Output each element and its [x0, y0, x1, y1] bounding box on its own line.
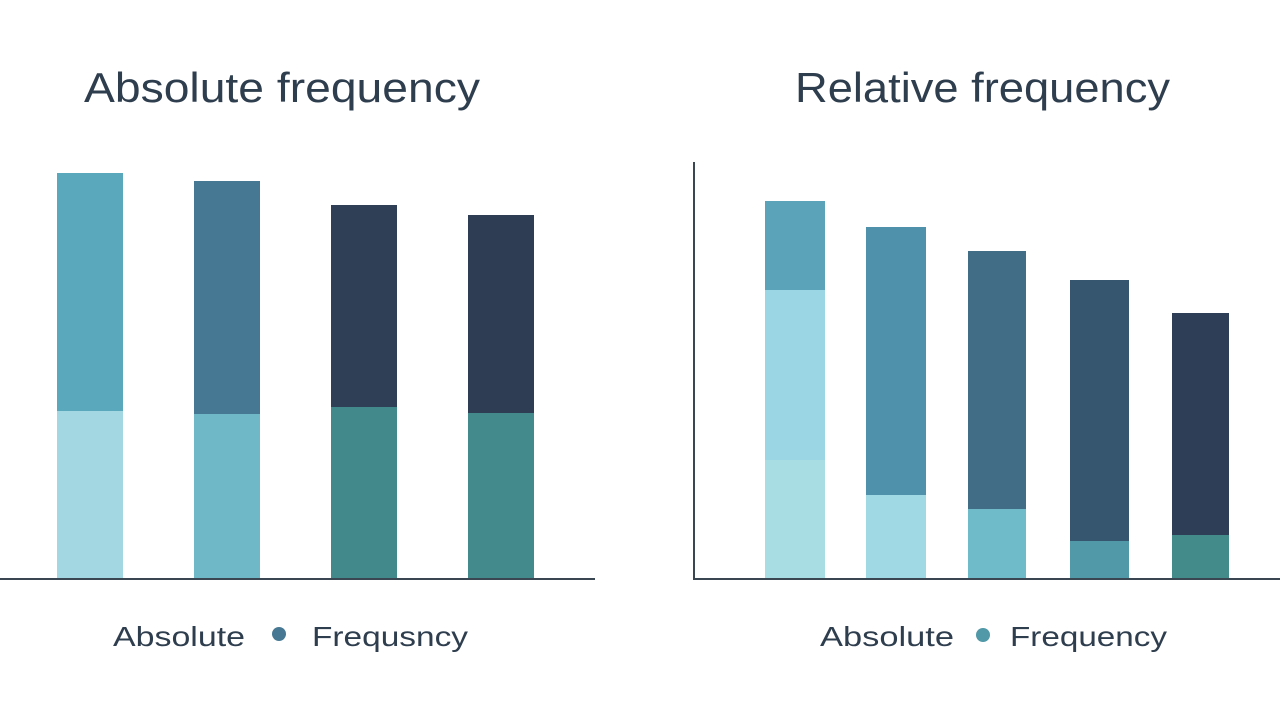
chart: relative frequency: [694, 162, 1280, 580]
bar 2: [194, 181, 260, 579]
legend: left: [113, 621, 468, 652]
legend: right: Frequency: [1010, 621, 1167, 652]
legend dot: [272, 627, 286, 641]
bar 4: [1070, 280, 1129, 579]
legend: right: [820, 621, 1167, 652]
legend: left: Frequsncy: [312, 621, 468, 652]
bar 5: [1172, 313, 1229, 579]
title: relative frequency: Relative frequency: [795, 64, 1170, 111]
legend: left: Absolute: [113, 621, 245, 652]
bar 1: [57, 173, 123, 579]
bar 3: [331, 205, 397, 579]
chart: absolute frequency: [0, 173, 595, 579]
bar 4: [468, 215, 534, 579]
legend: right: Absolute: [820, 621, 954, 652]
bar 1: [765, 201, 825, 579]
bar 2: [866, 227, 926, 579]
bar 3: [968, 251, 1026, 579]
legend dot: [976, 628, 990, 642]
title: absolute frequency: Absolute frequency: [84, 64, 480, 111]
